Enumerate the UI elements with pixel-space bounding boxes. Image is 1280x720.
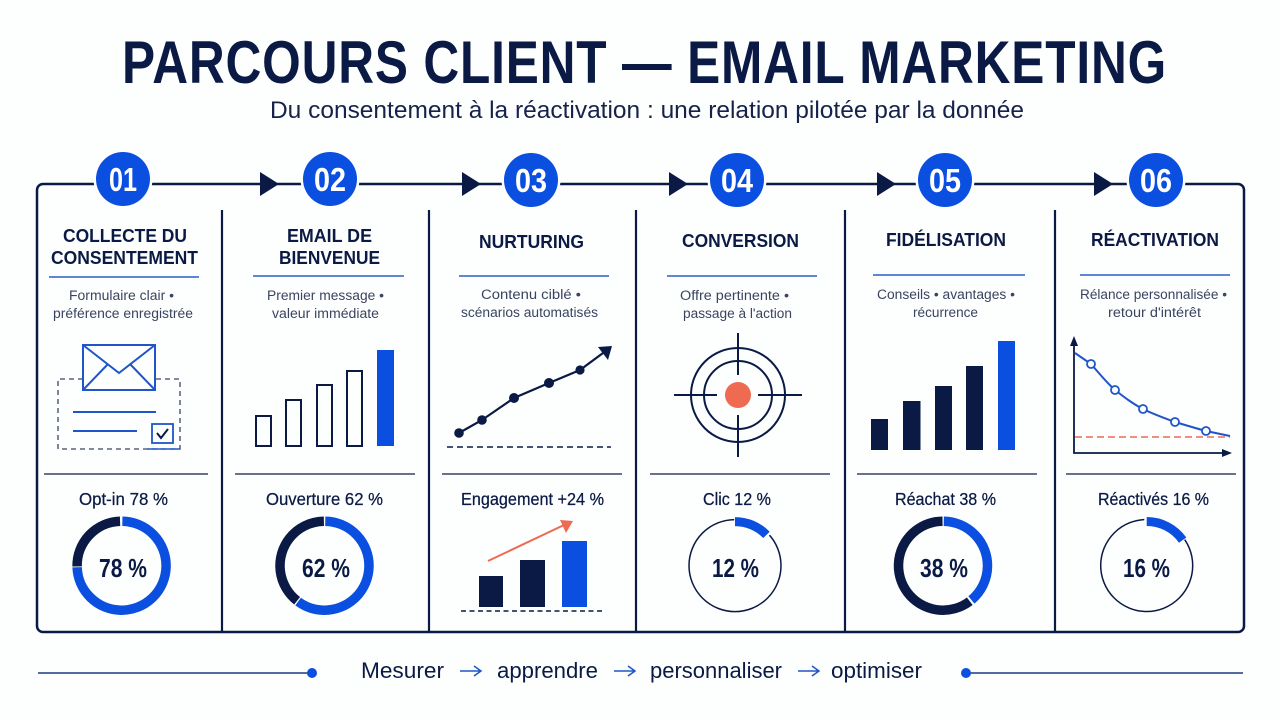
description: Rélance personnalisée • bbox=[1080, 287, 1227, 302]
footer: loop text: apprendre bbox=[497, 658, 598, 683]
heading: FIDÉLISATION bbox=[886, 229, 1006, 250]
panel: step 1 collecte du consentement bbox=[44, 226, 208, 611]
donut: 78 % bbox=[76, 520, 167, 611]
heading: NURTURING bbox=[479, 232, 584, 252]
metric label: Réactivés 16 % bbox=[1098, 489, 1209, 509]
heading: COLLECTE DU bbox=[63, 226, 187, 246]
step number badges: 05 bbox=[929, 162, 961, 199]
footer: loop text: Mesurer bbox=[361, 658, 444, 683]
description: Contenu ciblé • bbox=[481, 287, 581, 302]
footer: loop text: personnaliser bbox=[650, 658, 782, 683]
panel: step 4 conversion: passage à l'action bbox=[683, 306, 792, 321]
panel: step 6 réactivation bbox=[1066, 229, 1236, 612]
metric label: Opt-in 78 % bbox=[79, 489, 168, 509]
bar chart: engagement uplift bbox=[461, 520, 605, 611]
panel: step 5 fidélisation bbox=[857, 229, 1037, 628]
footer rule right bbox=[961, 668, 1243, 678]
heading: RÉACTIVATION bbox=[1091, 229, 1219, 250]
description: Premier message • bbox=[267, 288, 384, 303]
timeline arrows bbox=[260, 172, 1113, 196]
icon: envelope and form bbox=[58, 345, 180, 449]
footer rule left bbox=[38, 668, 317, 678]
subtitle: Du consentement à la réactivation : une relation pilotée par la donnée bbox=[270, 97, 1024, 124]
step number badges: 01 bbox=[109, 161, 137, 198]
panel: step 5 fidélisation: récurrence bbox=[913, 305, 978, 320]
bar chart: loyalty growth bbox=[871, 341, 1015, 450]
description: Conseils • avantages • bbox=[877, 287, 1015, 302]
description: Offre pertinente • bbox=[680, 288, 789, 303]
line chart: rising engagement bbox=[447, 346, 612, 447]
metric label: Clic 12 % bbox=[703, 489, 771, 509]
step number badges bbox=[94, 150, 1186, 210]
heading: EMAIL DE bbox=[287, 226, 372, 246]
panel: step 1 collecte du consentement: CONSENTEMENT bbox=[51, 248, 198, 268]
step number badges: 03 bbox=[515, 162, 547, 199]
step number badges: 04 bbox=[721, 162, 754, 199]
panel: step 2 email de bienvenue: BIENVENUE bbox=[279, 248, 380, 268]
heading: CONVERSION bbox=[682, 231, 799, 251]
column dividers bbox=[222, 210, 1055, 632]
donut: 62 %: 62 % bbox=[302, 553, 350, 583]
metric label: Réachat 38 % bbox=[895, 489, 996, 509]
donut: 16 %: 16 % bbox=[1123, 553, 1170, 583]
icon: target bbox=[674, 333, 802, 457]
step number badges: 02 bbox=[314, 161, 346, 198]
donut: 38 % bbox=[881, 503, 1005, 628]
bar chart: outlined growth bbox=[256, 350, 394, 446]
panel: step 3 nurturing: scénarios automatisés bbox=[461, 305, 598, 320]
panel: step 3 nurturing bbox=[442, 232, 622, 611]
panel: step 1 collecte du consentement: préférence enregistrée bbox=[53, 306, 193, 321]
donut: 12 %: 12 % bbox=[712, 553, 759, 583]
panel: step 2 email de bienvenue: valeur immédiate bbox=[272, 306, 379, 321]
donut: 16 % bbox=[1100, 519, 1193, 612]
description: Formulaire clair • bbox=[69, 288, 174, 303]
footer: loop text: optimiser bbox=[831, 658, 922, 683]
step number badges: 06 bbox=[1140, 162, 1172, 199]
panel: step 2 email de bienvenue bbox=[235, 226, 415, 628]
donut: 62 % bbox=[262, 503, 387, 628]
donut: 12 % bbox=[689, 520, 781, 612]
panel: step 4 conversion bbox=[650, 231, 830, 612]
main frame with timeline line bbox=[37, 184, 1244, 632]
metric label: Ouverture 62 % bbox=[266, 489, 383, 509]
line chart: decay curve bbox=[1070, 336, 1232, 457]
donut: 38 %: 38 % bbox=[920, 553, 968, 583]
donut: 78 %: 78 % bbox=[99, 553, 147, 583]
panel: step 6 réactivation: retour d'intérêt bbox=[1108, 305, 1201, 320]
metric label: Engagement +24 % bbox=[461, 489, 604, 509]
footer: loop text bbox=[361, 658, 922, 683]
